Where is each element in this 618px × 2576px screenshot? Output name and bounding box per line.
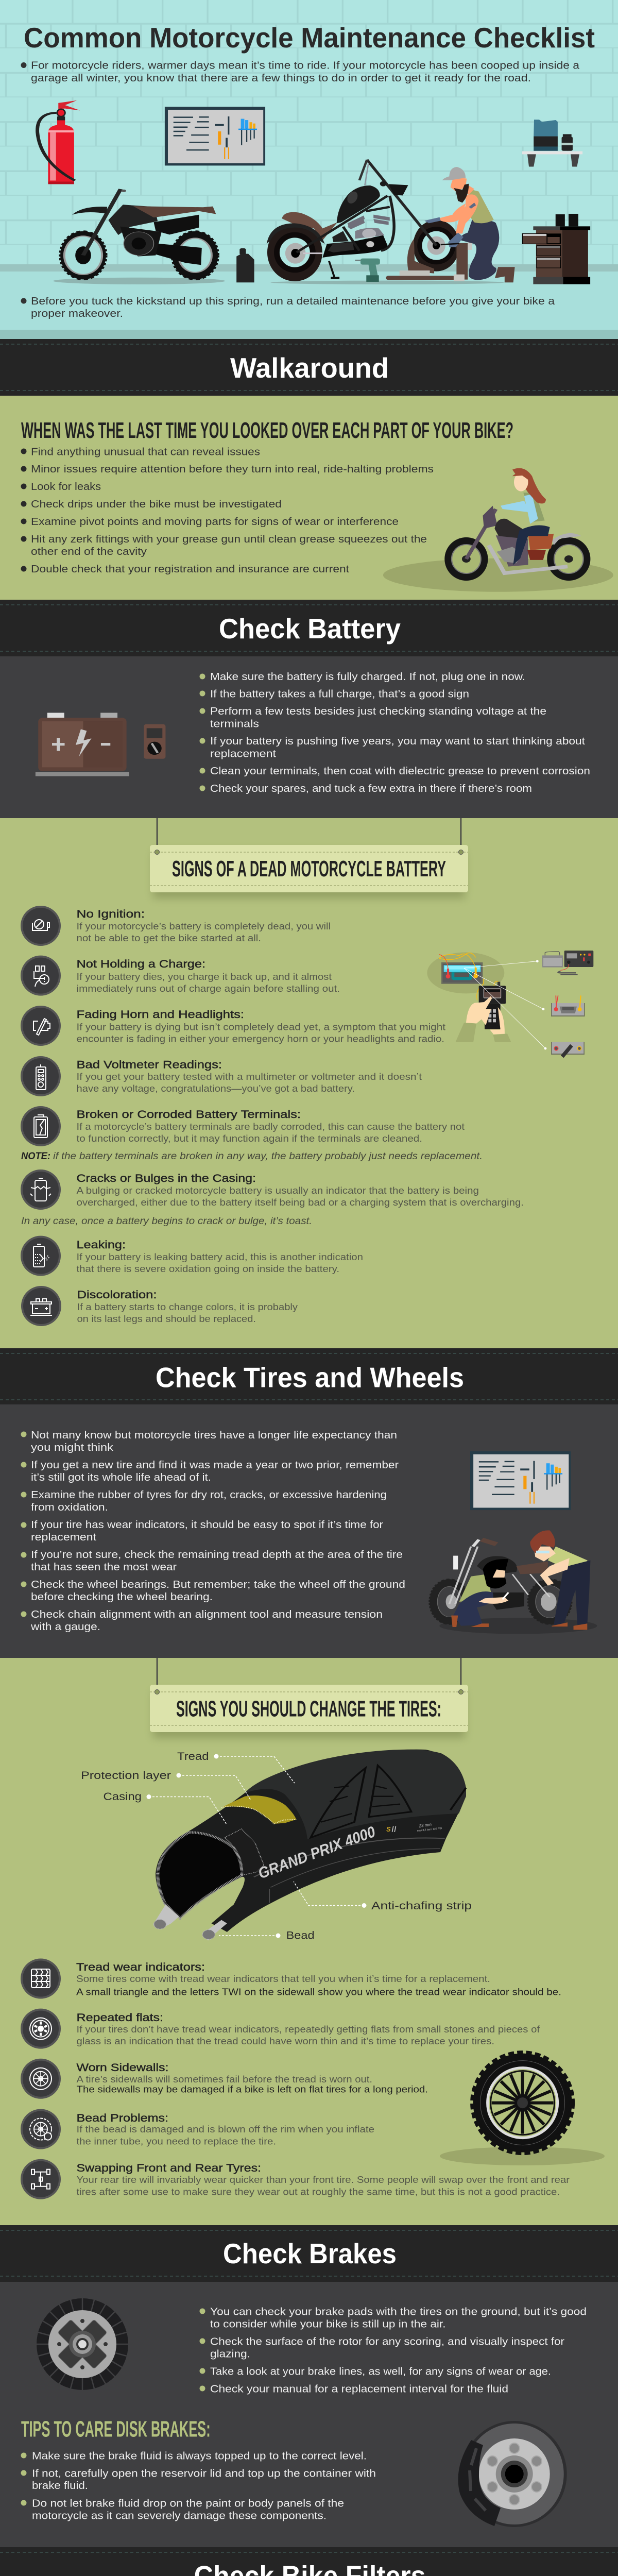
item: bead problems: Bead Problems:: [76, 2112, 168, 2124]
item: discoloration: [22, 1287, 298, 1325]
icon: disc brake: [458, 2421, 567, 2527]
sidewall lettering: 23 mm: [418, 1822, 432, 1828]
item: cracks or bulges: Cracks or Bulges in the Casing:: [76, 1173, 256, 1184]
illustration: mechanic with chopper: [267, 160, 515, 284]
bullet list: terminals: [210, 718, 259, 730]
tips list: Make sure the brake fluid is always topped up to the correct level.: [32, 2451, 367, 2462]
closing text: Before you tuck the kickstand up this spring, run a detailed maintenance before you give your bike a: [31, 296, 555, 307]
bullet list: Perform a few tests besides just checking standing voltage at the: [210, 706, 546, 717]
bullet list: Examine the rubber of tyres for dry rot, cracks, or excessive hardening: [31, 1489, 387, 1501]
item: bad voltmeter readings: Bad Voltmeter Readings:: [76, 1059, 222, 1071]
hanging sign: [150, 1658, 468, 1732]
labels and leader lines: Anti-chafing strip: [371, 1900, 472, 1912]
item: repeated flats: glass is an indication that the tread could have worn thin and it’s time to replace your tires.: [76, 2036, 494, 2046]
note: NOTE:: [21, 1151, 50, 1162]
bullet list: Clean your terminals, then coat with dielectric grease to prevent corrosion: [210, 766, 590, 777]
heading: check battery: Check Battery: [219, 613, 401, 645]
bullet list: from oxidation.: [31, 1502, 108, 1513]
sidewall lettering: II: [391, 1824, 397, 1834]
illustration: dirt bike: [53, 189, 225, 284]
bullet list: replacement: [31, 1532, 97, 1543]
item: not holding a charge: [22, 957, 340, 995]
bullet list: Take a look at your brake lines, as well, for any signs of wear or age.: [210, 2366, 551, 2377]
item: leaking: If your battery is leaking battery acid, this is another indication: [76, 1252, 363, 1262]
labels and leader lines: Casing: [103, 1791, 142, 1803]
item: not holding a charge: immediately runs out of charge again before stalling out.: [76, 984, 340, 994]
item: no ignition: not be able to get the bike started at all.: [76, 933, 261, 943]
bullet list: If you get a new tire and find it was made a year or two prior, remember: [31, 1460, 399, 1471]
bullet list: it’s still got its whole life ahead of it.: [31, 1472, 211, 1483]
panel: hero garage: [0, 0, 618, 339]
closing text: [21, 296, 555, 319]
bullet list: [200, 671, 590, 794]
item: leaking: [22, 1237, 363, 1275]
note: if the battery terminals are broken in any way, the battery probably just needs replacement.: [53, 1151, 483, 1162]
item: fading horn and headlights: If your battery is dying but isn’t completely dead yet, a symptom that you might: [76, 1022, 445, 1032]
bullet list: glazing.: [210, 2349, 250, 2360]
sidewall lettering: [256, 1822, 442, 1883]
illustration: battery tester: [427, 951, 593, 1057]
item: repeated flats: Repeated flats:: [76, 2012, 163, 2024]
item: discoloration: Discoloration:: [77, 1289, 157, 1301]
item: tread wear indicators: [22, 1960, 561, 1998]
illustration: battery and meter: [36, 713, 165, 776]
bullet list: with a gauge.: [30, 1621, 100, 1633]
bullet list: Double check that your registration and insurance are current: [31, 564, 349, 575]
item: tread wear indicators: Tread wear indicators:: [76, 1961, 205, 1973]
item: not holding a charge: If your battery dies, you charge it back up, and it almost: [76, 972, 332, 982]
closing text: proper makeover.: [31, 308, 123, 319]
title: Common Motorcycle Maintenance Checklist: [24, 22, 595, 54]
bullet list: Check your spares, and tuck a few extra in there if there’s room: [210, 783, 532, 794]
labels and leader lines: Protection layer: [81, 1770, 171, 1782]
item: no ignition: No Ignition:: [76, 908, 145, 920]
sidewall lettering: S: [386, 1825, 391, 1833]
bullet list: other end of the cavity: [31, 546, 147, 557]
item: cracks or bulges: overcharged, either due to the battery itself being bad or a charging system that is overcharging.: [76, 1197, 524, 1208]
item: discoloration: on its last legs and should be replaced.: [77, 1314, 256, 1324]
item: bad voltmeter readings: [22, 1057, 422, 1095]
heading: check brakes: Check Brakes: [223, 2238, 397, 2269]
item: repeated flats: If your tires don’t have tread wear indicators, repeatedly getting flats from small stones and pieces of: [76, 2024, 540, 2035]
tips list: motorcycle as it can severely damage these components.: [32, 2511, 327, 2522]
icon: oil bottle: [236, 248, 254, 282]
bullet list: Check the wheel bearings. But remember; take the wheel off the ground: [31, 1579, 405, 1590]
bullet list: you might think: [31, 1442, 114, 1453]
subheading: tips: TIPS TO CARE DISK BRAKES:: [21, 2416, 211, 2442]
bullet list: Look for leaks: [31, 481, 101, 493]
note: toast: In any case, once a battery begins to crack or bulge, it’s toast.: [21, 1216, 312, 1227]
heading: check tires: Check Tires and Wheels: [156, 1361, 464, 1393]
tips list: brake fluid.: [32, 2480, 88, 2492]
bullet list: Examine pivot points and moving parts for signs of wear or interference: [31, 516, 399, 528]
item: no ignition: If your motorcycle’s battery is completely dead, you will: [76, 921, 331, 931]
labels and leader lines: Bead: [286, 1930, 315, 1941]
item: tread wear indicators: Some tires come with tread wear indicators that tell you when it’s time for a replacement.: [76, 1974, 490, 1984]
icon: shelf with oil: [522, 120, 582, 166]
panel: walkaround: [0, 339, 618, 600]
item: swapping tyres: Swapping Front and Rear Tyres:: [76, 2162, 261, 2174]
item: bead problems: the inner tube, you need to replace the tire.: [76, 2137, 276, 2147]
item: broken terminals: to function correctly, but it may function again if the terminals are cleaned.: [76, 1133, 422, 1144]
tips list: Do not let brake fluid drop on the paint or body panels of the: [32, 2498, 344, 2509]
bullet list: Check the surface of the rotor for any scoring, and visually inspect for: [210, 2336, 564, 2347]
item: bad voltmeter readings: If you get your battery tested with a multimeter or voltmeter and it doesn’t: [76, 1072, 422, 1082]
icon: tool board: [470, 1451, 571, 1510]
bullet list: Check your manual for a replacement interval for the fluid: [210, 2383, 508, 2395]
intro text: garage all winter, you know that there are a few things to do in order to get it ready for the road.: [31, 73, 531, 84]
labels and leader lines: Tread: [177, 1751, 209, 1762]
heading: walkaround: Walkaround: [230, 352, 389, 384]
item: fading horn and headlights: [22, 1007, 445, 1045]
item: broken terminals: Broken or Corroded Battery Terminals:: [76, 1109, 301, 1121]
item: bead problems: If the bead is damaged and is blown off the rim when you inflate: [76, 2124, 374, 2134]
bullet list: If you’re not sure, check the remaining tread depth at the area of the tire: [31, 1549, 403, 1561]
hanging sign: [150, 818, 468, 892]
illustration: woman on motorcycle: [383, 468, 613, 592]
item: swapping tyres: tires after some use to make sure they wear out at roughly the same time, but this is not a good practice.: [76, 2187, 560, 2197]
item: leaking: Leaking:: [76, 1239, 126, 1251]
bullet list: You can check your brake pads with the tires on the ground, but it’s good: [210, 2306, 587, 2317]
bullet list: Not many know but motorcycle tires have a longer life expectancy than: [31, 1430, 397, 1441]
item: broken terminals: If a motorcycle’s battery terminals are badly corroded, this can cause the battery not: [76, 1122, 465, 1132]
item: repeated flats: [22, 2010, 540, 2048]
bullet list: Hit any zerk fittings with your grease gun until clean grease squeezes out the: [31, 534, 427, 545]
bullet list: that has seen the most wear: [31, 1562, 177, 1573]
item: swapping tyres: Your rear tire will invariably wear quicker than your front tire. Some people will swap over the front and rear: [76, 2175, 570, 2185]
item: worn sidewalls: Worn Sidewalls:: [76, 2062, 169, 2074]
panel: signs you should change the tires: [0, 1658, 618, 2225]
bullet list: before checking the wheel bearing.: [31, 1591, 213, 1603]
bullet list: Find anything unusual that can reveal issues: [31, 446, 260, 457]
sidewall lettering: max.8,5 bar / 120 PSI: [417, 1827, 442, 1833]
icon: fire extinguisher: [38, 100, 80, 184]
bullet list: Make sure the battery is fully charged. If not, plug one in now.: [210, 671, 525, 683]
item: discoloration: If a battery starts to change colors, it is probably: [77, 1302, 298, 1312]
bullet list: [21, 446, 434, 575]
bullet list: If your battery is pushing five years, you may want to start thinking about: [210, 736, 585, 747]
bullet list: If your tire has wear indicators, it should be easy to spot if it’s time for: [31, 1519, 383, 1531]
panel: check bike filters: [0, 2547, 618, 2576]
item: cracks or bulges: [22, 1171, 524, 1209]
item: tread wear indicators: A small triangle and the letters TWI on the sidewall show you where the tread wear indicator should be.: [76, 1987, 561, 1997]
panel: check battery: [0, 600, 618, 818]
diagram: tire cross-section: [81, 1750, 472, 1941]
item: no ignition: [22, 907, 331, 945]
tips list: [21, 2451, 376, 2522]
icon: clutch disc: [37, 2298, 128, 2390]
illustration: two mechanics: [430, 1530, 597, 1634]
bullet list: replacement: [210, 748, 277, 759]
bullet list: to consider while your bike is still up in the air.: [210, 2319, 446, 2330]
item: broken terminals: [22, 1107, 465, 1145]
bullet list: [200, 2306, 587, 2395]
icon: tool board: [165, 107, 265, 165]
item: worn sidewalls: The sidewalls may be damaged if a bike is left on flat tires for a long period.: [76, 2084, 428, 2095]
item: bead problems: [22, 2110, 374, 2148]
bullet list: Check chain alignment with an alignment tool and measure tension: [31, 1609, 383, 1620]
item: swapping tyres: [22, 2160, 570, 2198]
icon: tool cabinet: [522, 214, 590, 284]
panel: check tires and wheels: [0, 1348, 618, 1658]
intro text: For motorcycle riders, warmer days mean it’s time to ride. If your motorcycle has been cooped up inside a: [31, 60, 580, 71]
item: worn sidewalls: [22, 2060, 428, 2098]
bullet list: Check drips under the bike must be investigated: [31, 499, 282, 510]
bullet list: [21, 1430, 405, 1633]
panel: check brakes: [0, 2225, 618, 2547]
item: fading horn and headlights: encounter is fading in either your emergency horn or your headlights and radio.: [76, 1033, 444, 1044]
item: worn sidewalls: A tire’s sidewalls will sometimes fail before the tread is worn out.: [76, 2074, 372, 2084]
illustration: knobby tire: [440, 2054, 605, 2165]
intro text: [21, 60, 580, 84]
item: cracks or bulges: A bulging or cracked motorcycle battery is usually an indicator that the battery is being: [76, 1185, 479, 1196]
bullet list: If the battery takes a full charge, that’s a good sign: [210, 688, 469, 700]
panel: signs of a dead battery: [0, 818, 618, 1348]
tips list: If not, carefully open the reservoir lid and top up the container with: [32, 2468, 376, 2479]
sidewall lettering: GRAND PRIX 4000: [256, 1823, 378, 1883]
bullet list: Minor issues require attention before they turn into real, ride-halting problems: [31, 464, 434, 475]
item: leaking: that there is severe oxidation going on inside the battery.: [76, 1264, 339, 1274]
icon: cordless drill: [355, 259, 380, 282]
labels and leader lines: [81, 1751, 472, 1941]
item: not holding a charge: Not Holding a Charge:: [76, 958, 205, 970]
item: bad voltmeter readings: have any voltage, congratulations—you’ve got a bad battery.: [76, 1083, 355, 1094]
item: fading horn and headlights: Fading Horn and Headlights:: [76, 1009, 244, 1021]
